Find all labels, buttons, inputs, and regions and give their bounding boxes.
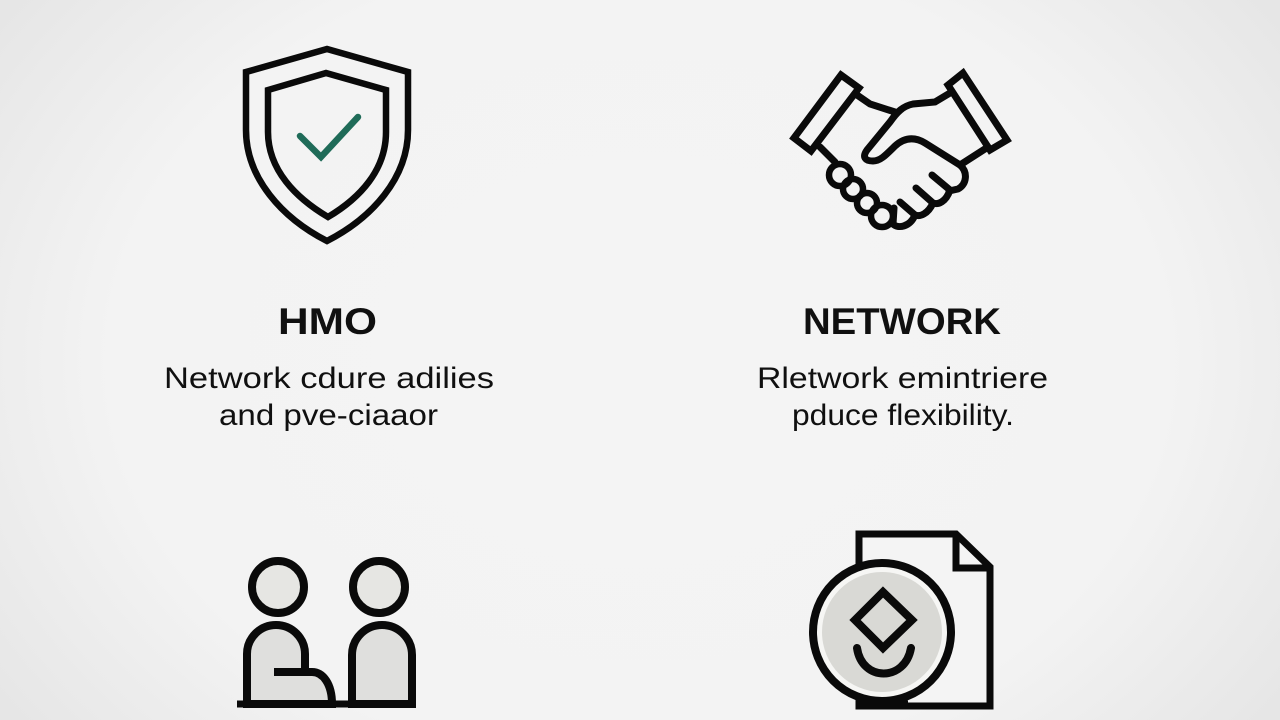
- heading: HMO: HMO: [278, 301, 377, 342]
- icon: shield with check mark: [246, 49, 408, 241]
- text: HMO description: and pve-ciaaor: [219, 399, 438, 432]
- heading: NETWORK: NETWORK: [803, 301, 1001, 342]
- text: NETWORK description: [757, 362, 1048, 432]
- text: NETWORK description: Rletwork emintriere: [757, 362, 1048, 395]
- text: HMO description: [164, 362, 494, 432]
- icon: handshake: [794, 73, 1007, 227]
- icon: two people: [237, 561, 415, 704]
- text: NETWORK description: pduce flexibility.: [792, 399, 1014, 432]
- text: HMO description: Network cdure adilies: [164, 362, 494, 395]
- icon: document with badge: [813, 534, 990, 706]
